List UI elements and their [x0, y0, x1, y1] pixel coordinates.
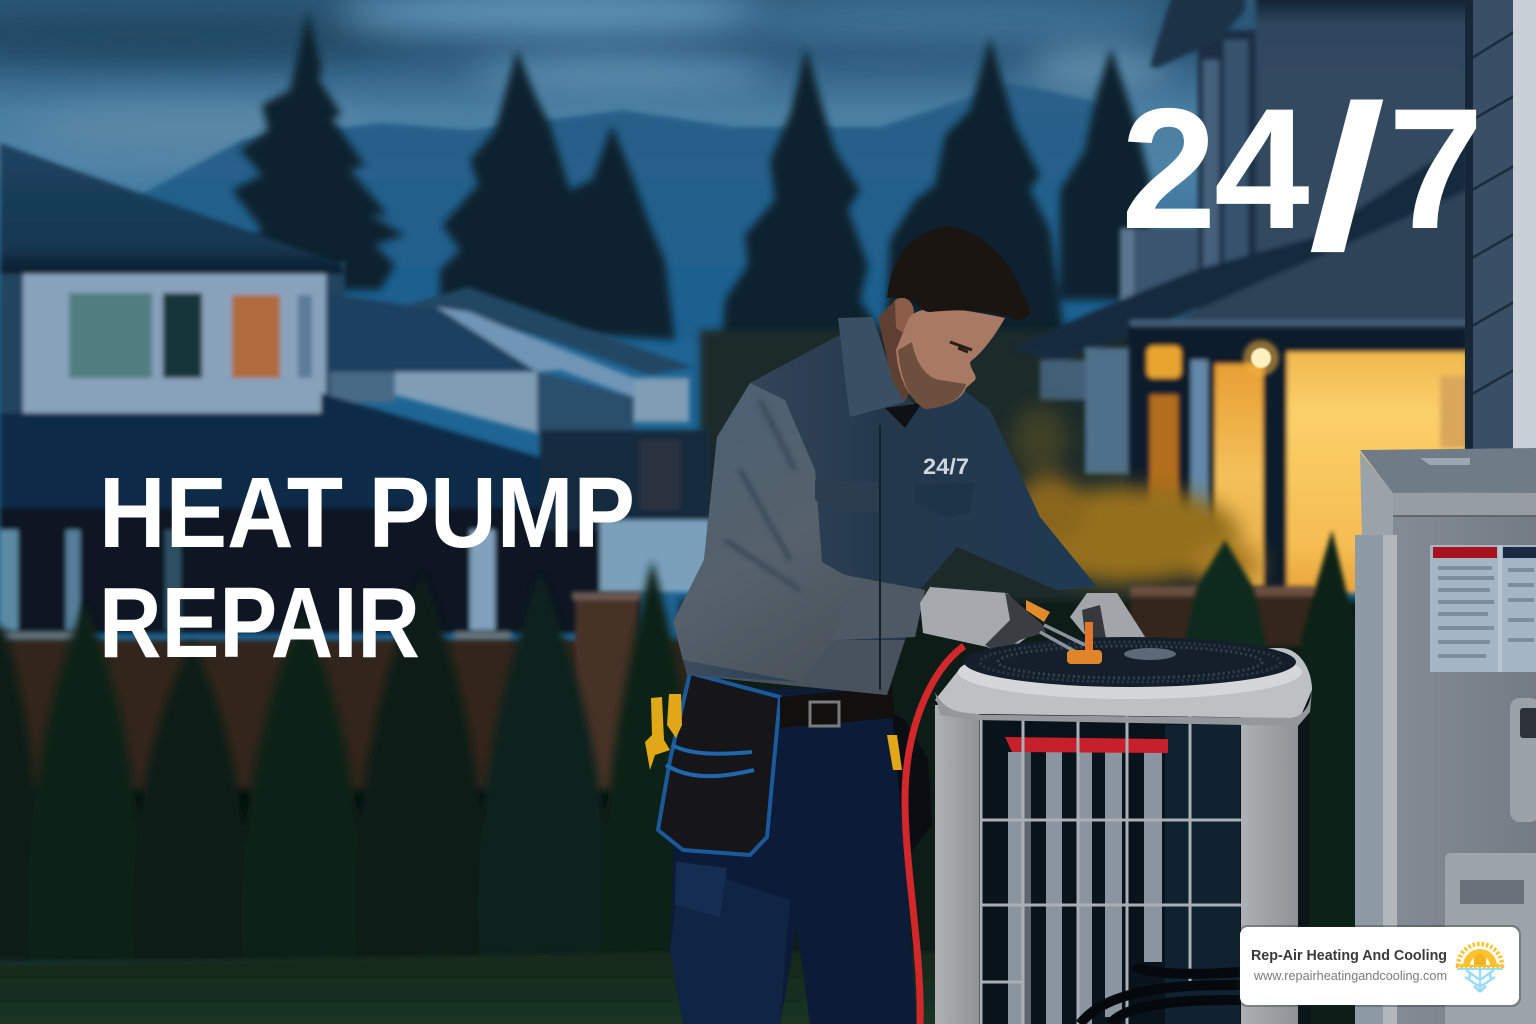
title: HEAT PUMP REPAIR: REPAIR: [99, 567, 420, 679]
heading: 24/7: 7: [1388, 73, 1484, 265]
tool pouch: [658, 673, 780, 855]
title: HEAT PUMP REPAIR: [99, 457, 635, 679]
beard: [898, 342, 966, 409]
backdrop: dark garden behind technician: [680, 330, 1380, 1024]
house: lit porch house on the right: [1010, 0, 1536, 930]
title: HEAT PUMP REPAIR: HEAT PUMP: [99, 457, 635, 569]
cables: [1080, 965, 1240, 1024]
eye and brow: [950, 342, 972, 352]
side handle: [1510, 698, 1536, 822]
heading: 24/7: /: [1308, 63, 1386, 292]
heading: 24/7: [1121, 63, 1484, 292]
house: blurred neighbouring house on the left: [0, 143, 710, 642]
hair: [887, 226, 1031, 320]
service box: [1445, 853, 1536, 1024]
cabinet: [935, 700, 1310, 1024]
face: [896, 308, 1005, 408]
red refrigerant hose: [905, 646, 964, 1024]
red refrigerant caps: [1005, 737, 1168, 753]
neck and ear: [878, 298, 920, 402]
technician: man repairing the unit: [645, 226, 1147, 1024]
fan grille: [964, 637, 1296, 687]
belt buckle: [810, 702, 839, 726]
hedge: row of dark arborvitae shrubs: [0, 560, 720, 965]
grille wires: [980, 716, 1248, 1024]
evergreen trees: [232, 12, 1150, 440]
lid: [935, 648, 1312, 718]
right heat pump unit: large gray cabinet: [1355, 448, 1536, 1024]
right glove: [1070, 593, 1147, 652]
brand card: Rep-Air Heating And Cooling: [1238, 925, 1521, 1007]
work pants: [670, 688, 917, 1024]
coils: [1008, 752, 1162, 1024]
icon: sun and snowflake logo: [1456, 944, 1504, 992]
shirt body and sleeve: [673, 317, 1097, 695]
brand name: Rep-Air Heating And Cooling: [1251, 948, 1447, 964]
yellow pouch tools: [645, 694, 902, 770]
left glove: [920, 587, 1046, 655]
fence: brown wooden fence: [0, 592, 700, 810]
tool belt: [780, 686, 895, 728]
outdoor AC unit in foreground: [935, 637, 1312, 1024]
orange manifold tool: [1026, 600, 1102, 664]
near wall siding: [1465, 0, 1536, 450]
cargo pocket on thigh: [670, 860, 790, 1024]
right pouch behind leg: [870, 700, 932, 860]
website: www.repairheatingandcooling.com: [1253, 969, 1447, 983]
lawn: [0, 952, 945, 1024]
mountains: [140, 83, 1130, 340]
heading: 24/7: 24: [1121, 73, 1310, 265]
chest embroidery: 24/7: [923, 454, 969, 479]
warning label on cabinet: [1430, 545, 1536, 672]
